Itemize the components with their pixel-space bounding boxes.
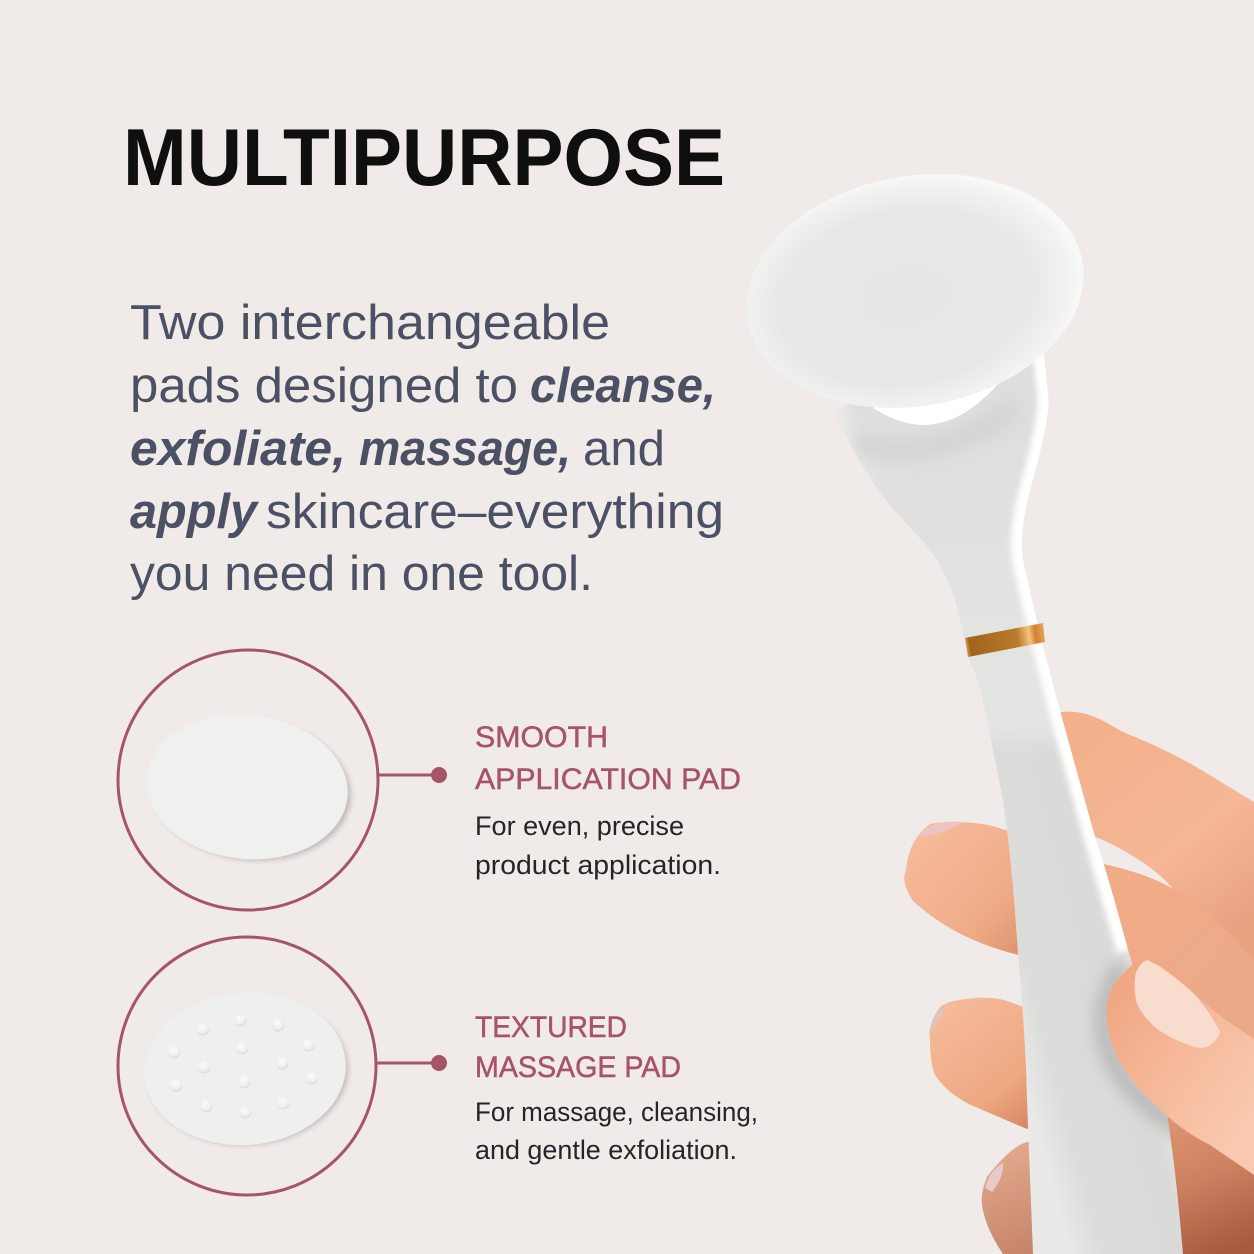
intro paragraph: and xyxy=(583,422,665,476)
connector: textured pad xyxy=(377,1055,447,1071)
label: textured massage pad: For massage, cleansing, xyxy=(475,1097,758,1127)
gold band xyxy=(965,623,1045,657)
label: smooth application pad: APPLICATION PAD xyxy=(475,763,741,796)
label: textured massage pad: TEXTURED xyxy=(475,1011,627,1044)
icon: textured pad xyxy=(139,986,353,1152)
middle finger and palm xyxy=(904,822,1254,1254)
icon: smooth pad xyxy=(139,705,358,870)
neck crease shade xyxy=(854,414,1004,456)
label: smooth application pad: For even, precise xyxy=(475,811,684,841)
hand holding the tool xyxy=(904,712,1254,1254)
intro paragraph: apply xyxy=(130,485,260,539)
title: MULTIPURPOSE xyxy=(123,113,725,203)
intro paragraph xyxy=(130,296,724,601)
label: textured massage pad: MASSAGE PAD xyxy=(475,1051,681,1084)
circle: textured pad xyxy=(118,937,376,1195)
circle: smooth pad xyxy=(118,650,378,910)
label: textured massage pad xyxy=(475,1011,758,1165)
intro paragraph: pads designed to xyxy=(130,359,518,413)
neck fill xyxy=(972,363,1065,732)
white crescent under pad xyxy=(873,384,998,425)
intro paragraph: exfoliate, xyxy=(130,422,346,476)
ring finger xyxy=(929,998,1060,1129)
label: smooth application pad: SMOOTH xyxy=(475,721,608,754)
fingernail: middle xyxy=(919,822,962,836)
pinky finger xyxy=(982,1140,1060,1254)
pad head xyxy=(728,148,1102,434)
label: smooth application pad: product application. xyxy=(475,850,721,880)
lower palm xyxy=(1100,1040,1254,1254)
handle right edge highlight xyxy=(1022,337,1128,950)
intro paragraph: cleanse, xyxy=(530,359,716,413)
intro paragraph: skincare–everything xyxy=(266,485,724,539)
label: textured massage pad: and gentle exfoliation. xyxy=(475,1135,737,1165)
tool handle xyxy=(820,330,1190,1254)
label: smooth application pad xyxy=(475,721,741,880)
intro paragraph: Two interchangeable xyxy=(130,296,610,350)
intro paragraph: you need in one tool. xyxy=(130,547,593,601)
index finger behind handle xyxy=(1040,712,1254,961)
thumb xyxy=(1106,960,1254,1175)
thumb nail xyxy=(1135,960,1220,1048)
thumb shadow on handle xyxy=(1104,965,1190,1135)
connector: smooth pad xyxy=(378,767,447,783)
intro paragraph: massage, xyxy=(359,422,571,476)
